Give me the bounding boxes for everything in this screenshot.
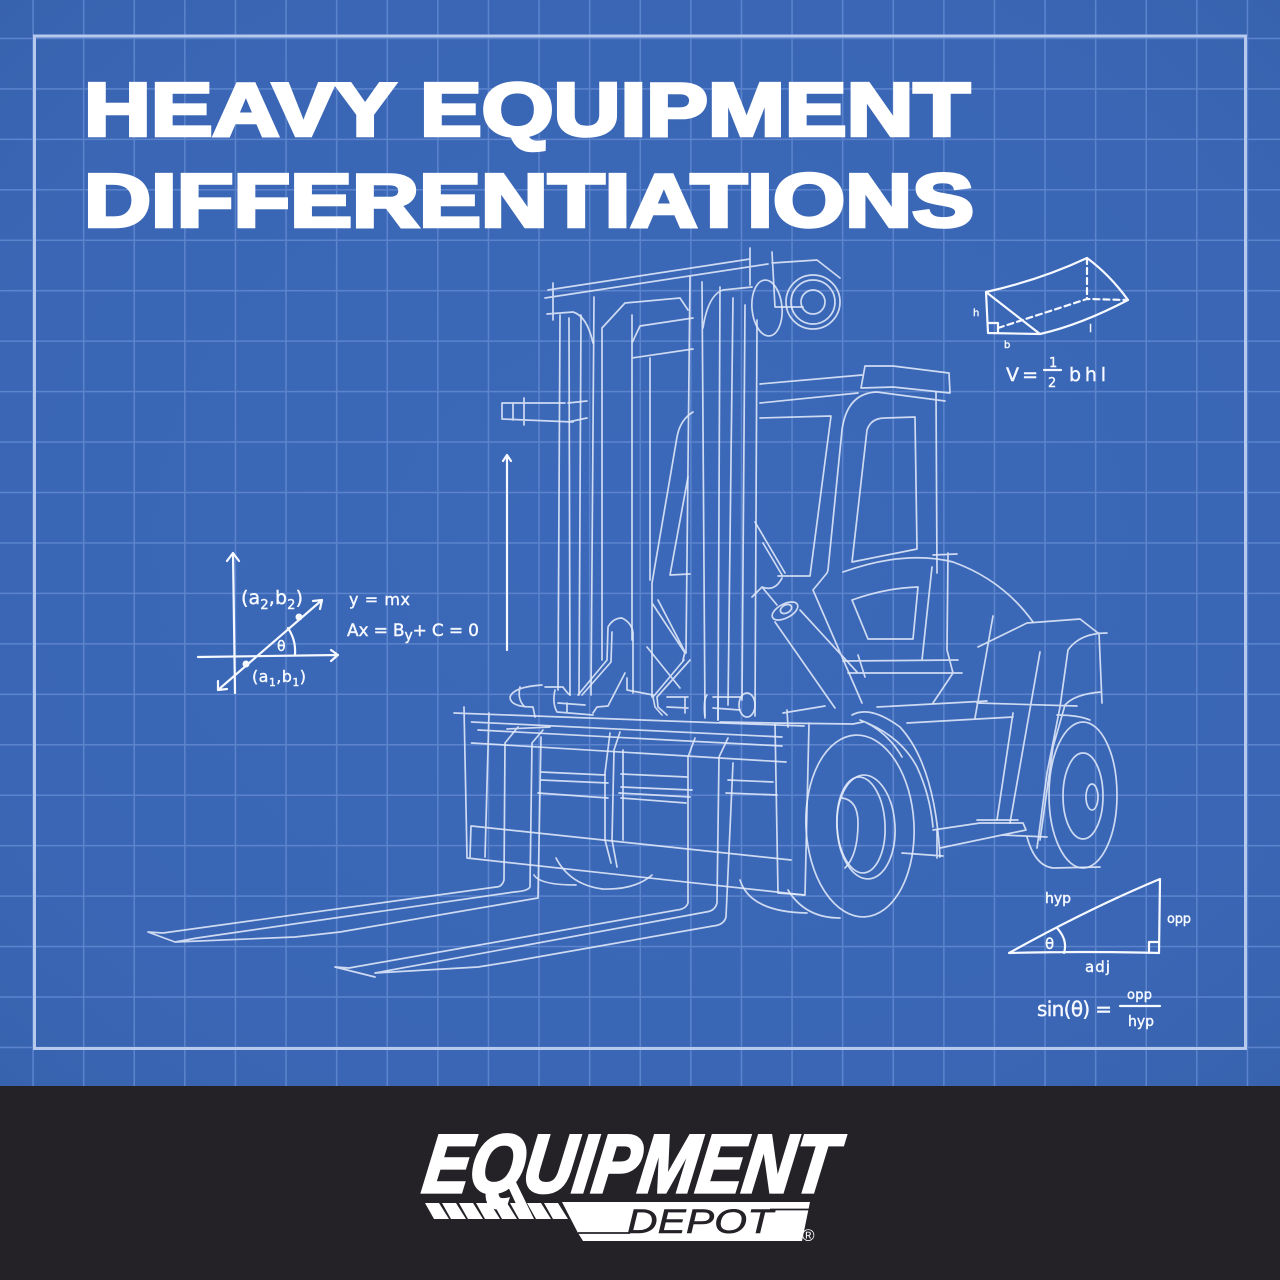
- math: linear equation graph: θ: [277, 639, 286, 655]
- math: linear equation graph: y: [404, 628, 413, 644]
- title: DIFFERENTIATIONS: [84, 158, 974, 242]
- title: HEAVY EQUIPMENT: [84, 68, 970, 152]
- lift arrow: [503, 455, 511, 650]
- carriage and forks: [148, 706, 863, 977]
- math: linear equation graph: ,b: [269, 587, 287, 609]
- math: triangular prism volume: 2: [1048, 376, 1056, 391]
- math: right triangle trigonometry: opp: [1167, 912, 1191, 927]
- forklift sketch: [148, 248, 1117, 977]
- rear wheel: [1027, 722, 1117, 868]
- math: linear equation graph: (a: [241, 587, 260, 609]
- hydraulic cylinder: [752, 578, 835, 708]
- frame border: [34, 36, 1246, 1048]
- math: right triangle trigonometry: hyp: [1128, 1014, 1154, 1030]
- lower pivot assembly: [510, 618, 755, 720]
- math: triangular prism volume: V =: [1006, 364, 1038, 386]
- logo depot: DEPOT: [627, 1203, 776, 1241]
- math: right triangle trigonometry: θ: [1045, 935, 1054, 953]
- logo wordmark: EQUIPMENT: [418, 1118, 849, 1210]
- math: linear equation graph: [198, 553, 479, 693]
- math: linear equation graph: (a: [252, 667, 268, 686]
- math: linear equation graph: + C = 0: [413, 621, 479, 641]
- math: triangular prism volume: [973, 258, 1128, 391]
- cab: [755, 366, 1033, 703]
- body and fender: [852, 616, 1107, 858]
- math: linear equation graph: ): [300, 667, 306, 686]
- upper stub: [502, 398, 587, 425]
- footer bar: [0, 1086, 1280, 1280]
- math: triangular prism volume: h: [973, 308, 979, 319]
- math: right triangle trigonometry: opp: [1127, 988, 1152, 1003]
- mast: [545, 248, 840, 720]
- logo stripes and q tail: [425, 1180, 568, 1219]
- math: right triangle trigonometry: [1009, 879, 1191, 1030]
- math: triangular prism volume: l: [1089, 322, 1092, 335]
- front wheel: [801, 732, 919, 920]
- math: right triangle trigonometry: hyp: [1045, 891, 1071, 907]
- math: triangular prism volume: b: [1004, 340, 1010, 351]
- registered mark: ®: [802, 1226, 815, 1245]
- math: linear equation graph: 1: [292, 676, 299, 689]
- math: linear equation graph: ,b: [276, 667, 292, 686]
- math: linear equation graph: y = mx: [349, 590, 410, 609]
- math: triangular prism volume: bhl: [1069, 364, 1106, 386]
- logo band dark rules: [578, 1210, 809, 1233]
- math: linear equation graph: 1: [269, 676, 276, 689]
- math: linear equation graph: 2: [287, 598, 295, 613]
- math: linear equation graph: ): [296, 587, 303, 609]
- logo: [418, 1118, 849, 1245]
- math: linear equation graph: 2: [260, 598, 269, 613]
- logo band: [562, 1202, 810, 1241]
- math: triangular prism volume: 1: [1049, 356, 1057, 371]
- math: right triangle trigonometry: sin(θ) =: [1037, 997, 1112, 1021]
- math: right triangle trigonometry: adj: [1085, 958, 1110, 976]
- math: linear equation graph: Ax = B: [347, 621, 405, 641]
- title: [84, 68, 974, 242]
